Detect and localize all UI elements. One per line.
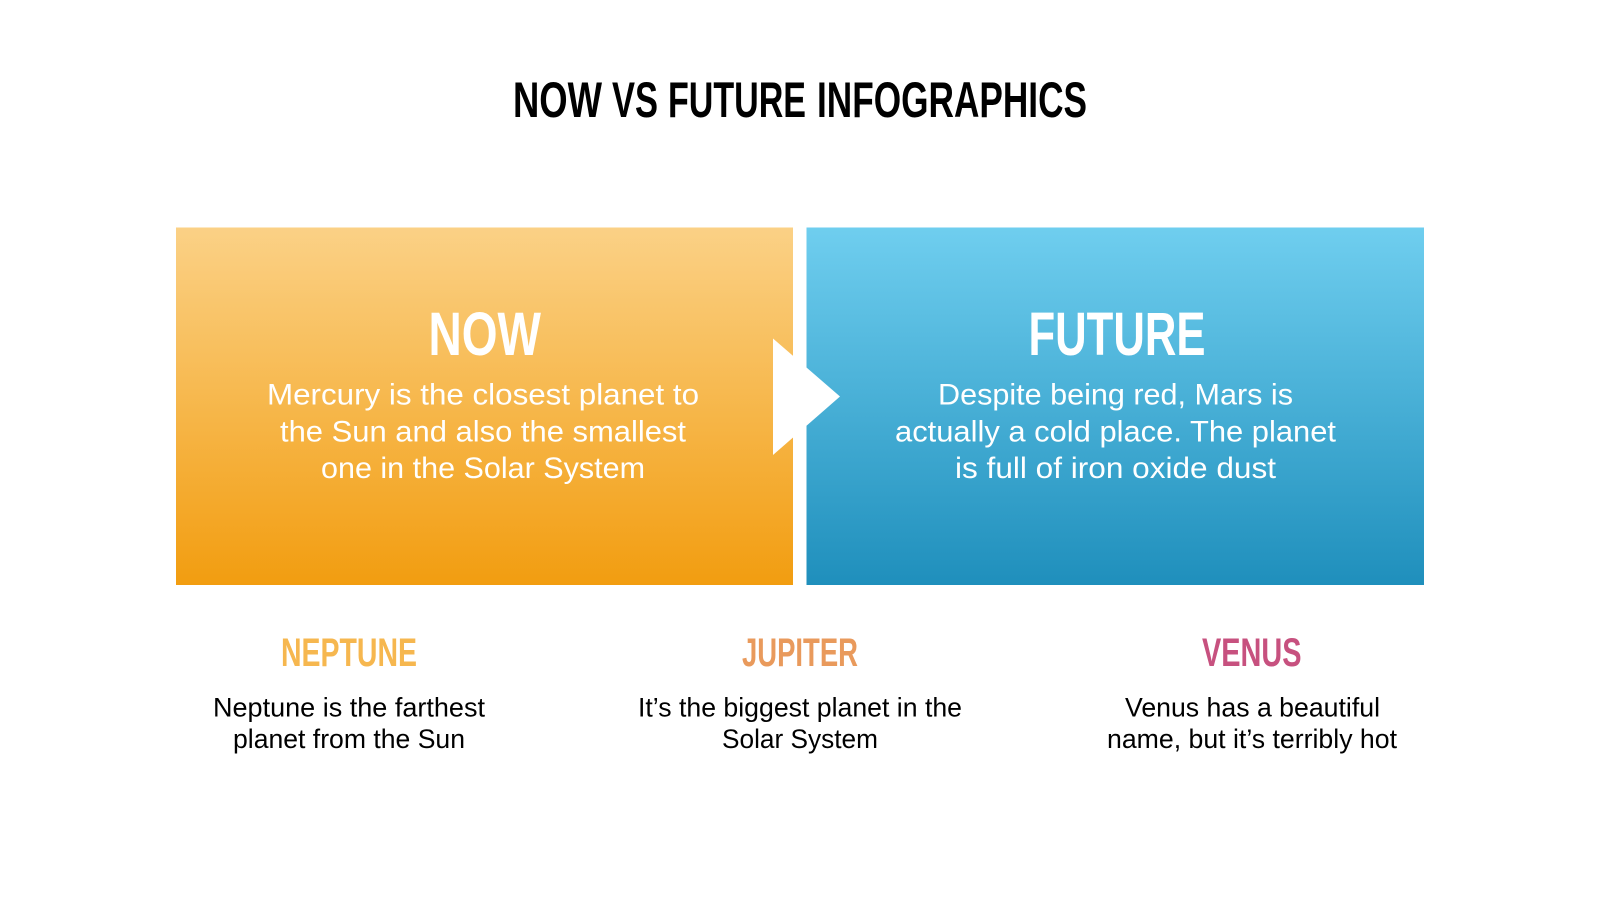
- column: venus: [1107, 631, 1398, 754]
- text: neptune description: [213, 692, 486, 754]
- text: venus description: [1107, 692, 1398, 754]
- text: jupiter description: It’s the biggest planet in the: [638, 692, 962, 722]
- title: VS: [612, 72, 658, 128]
- text: future description: Despite being red, Mars is: [938, 378, 1293, 412]
- arrow: now to future: [773, 338, 840, 455]
- text: future description: is full of iron oxide dust: [955, 452, 1277, 485]
- heading: neptune: NEPTUNE: [281, 631, 417, 675]
- heading: future: FUTURE: [1028, 300, 1206, 368]
- heading: now: NOW: [428, 300, 541, 368]
- title: INFOGRAPHICS: [817, 72, 1087, 128]
- text: jupiter description: [638, 692, 962, 754]
- panel: now: [176, 228, 793, 585]
- text: now description: one in the Solar System: [321, 452, 645, 485]
- title: NOW: [513, 72, 603, 128]
- column: neptune: [213, 631, 486, 754]
- heading: venus: VENUS: [1202, 631, 1302, 675]
- text: now description: Mercury is the closest planet to: [267, 378, 699, 412]
- text: venus description: name, but it’s terribly hot: [1107, 724, 1398, 754]
- text: venus description: Venus has a beautiful: [1125, 692, 1380, 722]
- text: future description: [895, 378, 1337, 485]
- text: now description: [267, 378, 699, 485]
- title: [513, 72, 1087, 128]
- panel: future: [806, 228, 1424, 585]
- column: jupiter: [638, 631, 962, 754]
- text: neptune description: planet from the Sun: [233, 724, 465, 754]
- text: jupiter description: Solar System: [722, 724, 878, 754]
- text: neptune description: Neptune is the farthest: [213, 692, 486, 722]
- text: now description: the Sun and also the smallest: [280, 416, 687, 448]
- title: FUTURE: [668, 72, 806, 128]
- heading: jupiter: JUPITER: [742, 631, 858, 675]
- text: future description: actually a cold place. The planet: [895, 416, 1337, 448]
